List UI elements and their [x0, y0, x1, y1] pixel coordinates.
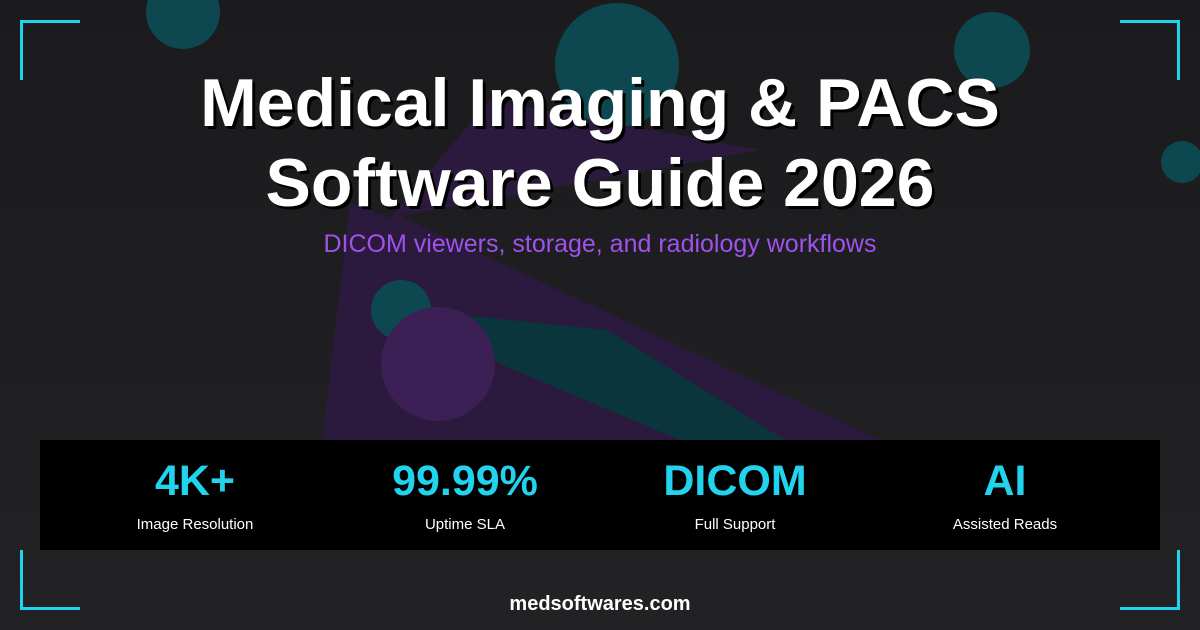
stat: uptime: Uptime SLA	[425, 516, 505, 533]
stat: ai: Assisted Reads	[953, 516, 1057, 533]
stats bar	[40, 440, 1160, 550]
stat: resolution: 4K+	[155, 457, 235, 505]
stat: ai	[952, 457, 1057, 533]
stat: resolution	[137, 457, 253, 533]
title: Medical Imaging & PACS	[200, 65, 1000, 141]
footer url: medsoftwares.com	[509, 593, 691, 615]
stat: ai: AI	[984, 457, 1026, 505]
stat: uptime	[392, 457, 538, 533]
stat: dicom: DICOM	[663, 457, 807, 505]
title: Software Guide 2026	[266, 145, 934, 221]
title	[200, 65, 1000, 221]
stat: resolution: Image Resolution	[137, 516, 253, 533]
subtitle: DICOM viewers, storage, and radiology workflows	[324, 230, 876, 258]
stat: dicom: Full Support	[695, 516, 775, 533]
stat: uptime: 99.99%	[392, 457, 538, 505]
stat: dicom	[663, 457, 807, 533]
